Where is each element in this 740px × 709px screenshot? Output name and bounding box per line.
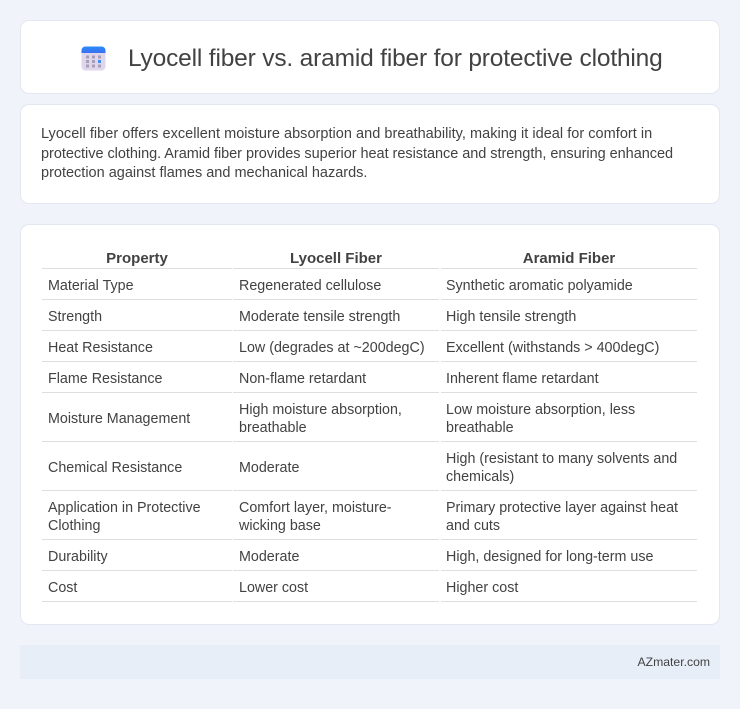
row: Chemical Resistance — [48, 451, 677, 485]
row: Moisture Management: breathable — [239, 420, 307, 436]
summary text: protective clothing. Aramid fiber provides superior heat resistance and strength, ensuring enhanced — [41, 146, 673, 162]
row: Flame Resistance: Flame Resistance — [48, 371, 162, 387]
summary text — [41, 126, 673, 181]
row: Cost: Higher cost — [446, 580, 518, 596]
row: Flame Resistance — [48, 371, 599, 387]
row: Cost: Lower cost — [239, 580, 308, 596]
row: Moisture Management: Moisture Management — [48, 411, 190, 427]
row: Strength: High tensile strength — [446, 309, 576, 325]
row: Application in Protective Clothing: Clothing — [48, 518, 100, 534]
row: Heat Resistance: Heat Resistance — [48, 340, 153, 356]
row: Moisture Management — [48, 402, 635, 436]
row: Heat Resistance — [48, 340, 659, 356]
row: Chemical Resistance: Moderate — [239, 460, 299, 476]
title: Lyocell fiber vs. aramid fiber for protective clothing — [128, 45, 663, 72]
row: Moisture Management: breathable — [446, 420, 514, 436]
row: Strength: Moderate tensile strength — [239, 309, 400, 325]
row: Heat Resistance: Low (degrades at ~200degC) — [239, 340, 425, 356]
panel: comparison table — [20, 224, 720, 625]
row: Application in Protective Clothing: Primary protective layer against heat — [446, 500, 678, 516]
footer bar — [20, 645, 720, 679]
row: Heat Resistance: Excellent (withstands > 400degC) — [446, 340, 659, 356]
panel: summary — [20, 104, 720, 204]
row: Durability — [48, 549, 653, 565]
panel: title card — [20, 20, 720, 94]
row: Application in Protective Clothing: Application in Protective — [48, 500, 201, 516]
table header row — [106, 250, 615, 267]
header: Lyocell Fiber: Lyocell Fiber — [290, 250, 382, 267]
row: Cost: Cost — [48, 580, 77, 596]
icon: calendar — [82, 46, 106, 70]
footer text: AZmater.com — [638, 655, 710, 669]
row: Durability: High, designed for long-term use — [446, 549, 653, 565]
row: Flame Resistance: Inherent flame retardant — [446, 371, 599, 387]
row: Strength: Strength — [48, 309, 102, 325]
row: Moisture Management: Low moisture absorption, less — [446, 402, 635, 418]
row: Application in Protective Clothing: wicking base — [239, 518, 321, 534]
row: Cost — [48, 580, 518, 596]
summary text: protection against flames and mechanical hazards. — [41, 165, 367, 181]
row: Chemical Resistance: chemicals) — [446, 469, 514, 485]
header: Property: Property — [106, 250, 168, 267]
row: Material Type: Synthetic aromatic polyamide — [446, 278, 633, 294]
header: Aramid Fiber: Aramid Fiber — [523, 250, 615, 267]
row: Durability: Durability — [48, 549, 108, 565]
row: Flame Resistance: Non-flame retardant — [239, 371, 366, 387]
row: Material Type: Regenerated cellulose — [239, 278, 381, 294]
row: Application in Protective Clothing: Comfort layer, moisture- — [239, 500, 392, 516]
row: Strength — [48, 309, 576, 325]
row: Durability: Moderate — [239, 549, 299, 565]
row: Moisture Management: High moisture absorption, — [239, 402, 402, 418]
row: Application in Protective Clothing — [48, 500, 678, 534]
row: Chemical Resistance: High (resistant to many solvents and — [446, 451, 677, 467]
row: Chemical Resistance: Chemical Resistance — [48, 460, 182, 476]
row: Application in Protective Clothing: and cuts — [446, 518, 500, 534]
row: Material Type: Material Type — [48, 278, 134, 294]
row: Material Type — [48, 278, 633, 294]
summary text: Lyocell fiber offers excellent moisture absorption and breathability, making it ideal for comfort in — [41, 126, 652, 142]
